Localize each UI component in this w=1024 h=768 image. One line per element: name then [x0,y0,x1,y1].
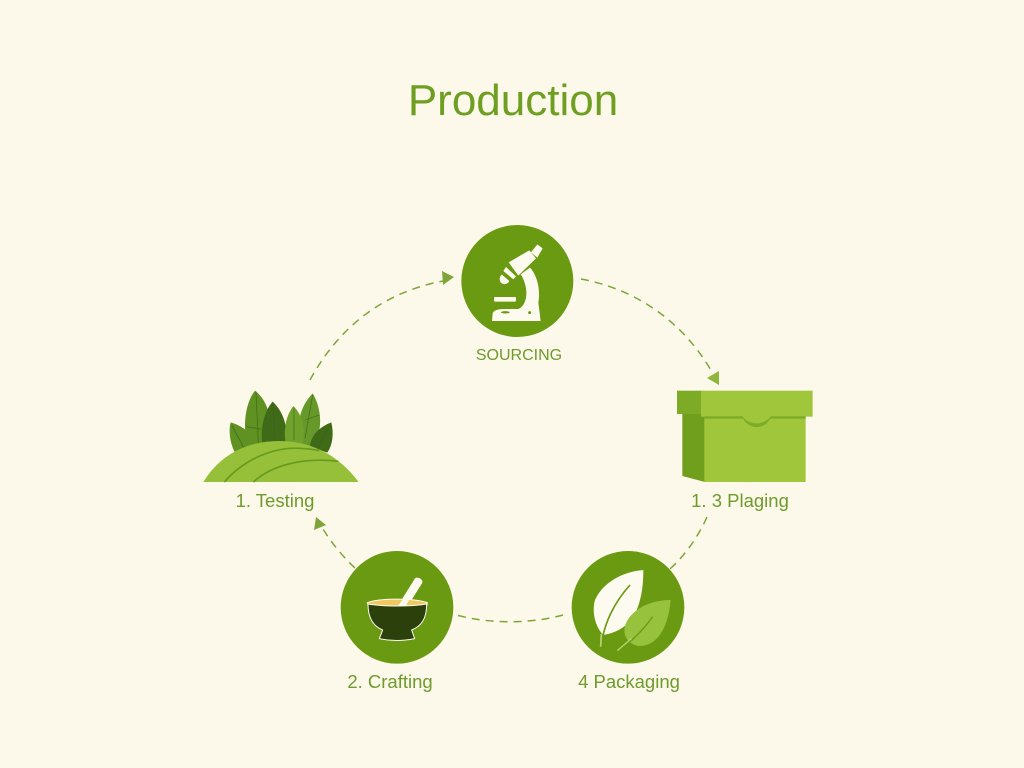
label: sourcing: SOURCING [476,347,562,364]
step: sourcing [461,225,573,364]
arrow: crafting to testing [314,517,355,568]
step: playing box [677,391,813,511]
icon: box [677,391,813,482]
leaves [230,391,333,460]
step: testing [203,391,359,511]
icon: leaves on hill [203,391,359,482]
label: packaging: 4 Packaging [578,671,680,692]
step: packaging [572,551,684,692]
icon: microscope [461,225,573,337]
label: crafting: 2. Crafting [347,671,433,692]
arrow: testing to sourcing [310,271,454,380]
arrow: box to leaf [670,517,707,569]
hill [203,441,359,482]
icon: mortar and pestle [341,551,453,664]
step: crafting [341,551,453,692]
title: Production [408,76,618,125]
icon: leaves [572,551,684,664]
arrow: sourcing to packaging box [581,279,719,385]
label: playing: 1. 3 Plaging [691,490,789,511]
arrow: leaf to crafting [456,615,563,622]
label: testing: 1. Testing [236,490,314,511]
